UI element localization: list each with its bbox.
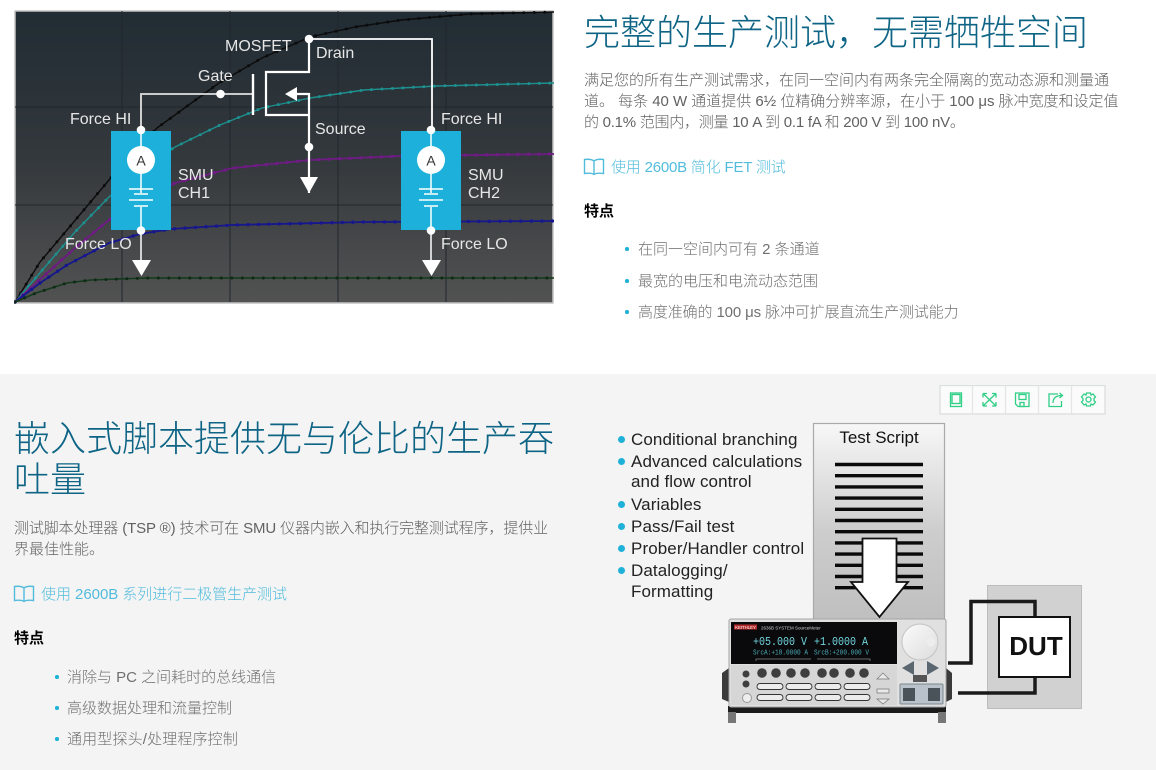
text block: lower section description: 测试脚本处理器 (TSP ®) 技术可在 SMU 仪器内嵌入和执行完整测试程序，提供业	[14, 520, 548, 537]
labels: CH1	[178, 185, 210, 202]
list: test script capabilities: Datalogging/	[631, 561, 728, 580]
link: top section: 使用 2600B 简化 FET 测试	[611, 159, 786, 176]
instrument: SourceMeter: KEITHLEY	[735, 625, 756, 630]
text block: top section description	[584, 72, 1118, 131]
DUT panel	[948, 586, 1082, 708]
list: test script capabilities: Pass/Fail test	[631, 517, 734, 536]
list: test script capabilities: Variables	[631, 495, 702, 514]
list: features top: 在同一空间内可有 2 条通道	[638, 241, 820, 258]
terminals and arrows	[127, 35, 445, 276]
text block: top section description: 的 0.1% 范围内，测量 10 A 到 0.1 fA 和 200 V 到 100 nV。	[584, 114, 965, 131]
list: features lower: 高级数据处理和流量控制	[67, 700, 232, 717]
icon: book link top	[584, 158, 604, 176]
labels: A	[426, 152, 436, 168]
heading: top section: 完整的生产测试，无需牺牲空间	[584, 4, 1088, 56]
link: lower section: 使用 2600B 系列进行二极管生产测试	[41, 586, 287, 603]
chart: MOSFET SMU circuit diagram	[14, 10, 554, 304]
heading: features lower: 特点	[14, 630, 44, 647]
labels	[65, 38, 508, 253]
labels: Force LO	[65, 236, 132, 253]
instrument: SourceMeter: 2636B SYSTEM SourceMeter	[761, 625, 821, 630]
heading: lower section	[14, 410, 554, 503]
labels: Force HI	[70, 111, 131, 128]
icon: settings	[1082, 393, 1096, 406]
list: test script capabilities	[618, 430, 804, 601]
instrument: SourceMeter: +05.000 V	[753, 635, 808, 649]
instrument: SourceMeter: SrcB:+200.000 V	[814, 650, 870, 658]
labels: Source	[315, 121, 366, 138]
list: features top: 最宽的电压和电流动态范围	[638, 273, 818, 290]
toolbar: icon buttons	[940, 385, 1106, 414]
icon: share	[1049, 393, 1062, 406]
instrument: SourceMeter: +1.0000 A	[814, 635, 869, 649]
list: test script capabilities: Formatting	[631, 582, 713, 601]
list: test script capabilities: Advanced calculations	[631, 452, 802, 471]
SMU CH1 box	[111, 131, 461, 230]
text block: top section description: 满足您的所有生产测试需求，在同一空间内有两条完全隔离的宽动态源和测量通	[584, 72, 1109, 89]
panel: lower section background	[0, 374, 1156, 770]
icon: save	[1016, 393, 1029, 406]
list: features lower: 消除与 PC 之间耗时的总线通信	[67, 669, 276, 686]
list: test script capabilities: Prober/Handler control	[631, 539, 804, 558]
icon: book link lower	[14, 586, 34, 602]
list: features lower: 通用型探头/处理程序控制	[67, 731, 238, 748]
test script page	[814, 424, 944, 620]
text block: lower section description	[14, 520, 548, 558]
labels: Drain	[316, 45, 354, 62]
labels: SMU	[178, 167, 214, 184]
diagram: test script, instrument and DUT	[722, 422, 1082, 723]
icon: tablet	[950, 393, 962, 406]
instrument: SourceMeter: SrcA:+10.0000 A	[753, 650, 809, 658]
labels: Force HI	[441, 111, 502, 128]
wiring	[129, 39, 443, 262]
test script page: Test Script	[839, 428, 919, 447]
DUT panel: DUT	[1009, 631, 1063, 661]
instrument: SourceMeter	[722, 619, 952, 723]
list: features top	[625, 241, 959, 321]
labels: Force LO	[441, 236, 508, 253]
labels: SMU	[468, 167, 504, 184]
labels: CH2	[468, 185, 500, 202]
icon: expand	[983, 394, 996, 406]
heading: lower section: 吐量	[14, 451, 86, 503]
labels: A	[136, 152, 146, 168]
labels: Gate	[198, 68, 233, 85]
heading: lower section: 嵌入式脚本提供无与伦比的生产吞	[14, 410, 554, 462]
list: features lower	[55, 669, 276, 748]
curves	[15, 12, 554, 302]
labels: MOSFET	[225, 38, 292, 55]
list: test script capabilities: Conditional branching	[631, 430, 798, 449]
text block: top section description: 道。 每条 40 W 通道提供 6½ 位精确分辨率源，在小于 100 μs 脉冲宽度和设定值	[584, 93, 1118, 110]
arrow: script into instrument	[851, 538, 908, 617]
text block: lower section description: 界最佳性能。	[14, 541, 104, 558]
heading: features top: 特点	[584, 203, 614, 220]
list: features top: 高度准确的 100 μs 脉冲可扩展直流生产测试能力	[638, 304, 959, 321]
list: test script capabilities: and flow control	[631, 472, 752, 491]
